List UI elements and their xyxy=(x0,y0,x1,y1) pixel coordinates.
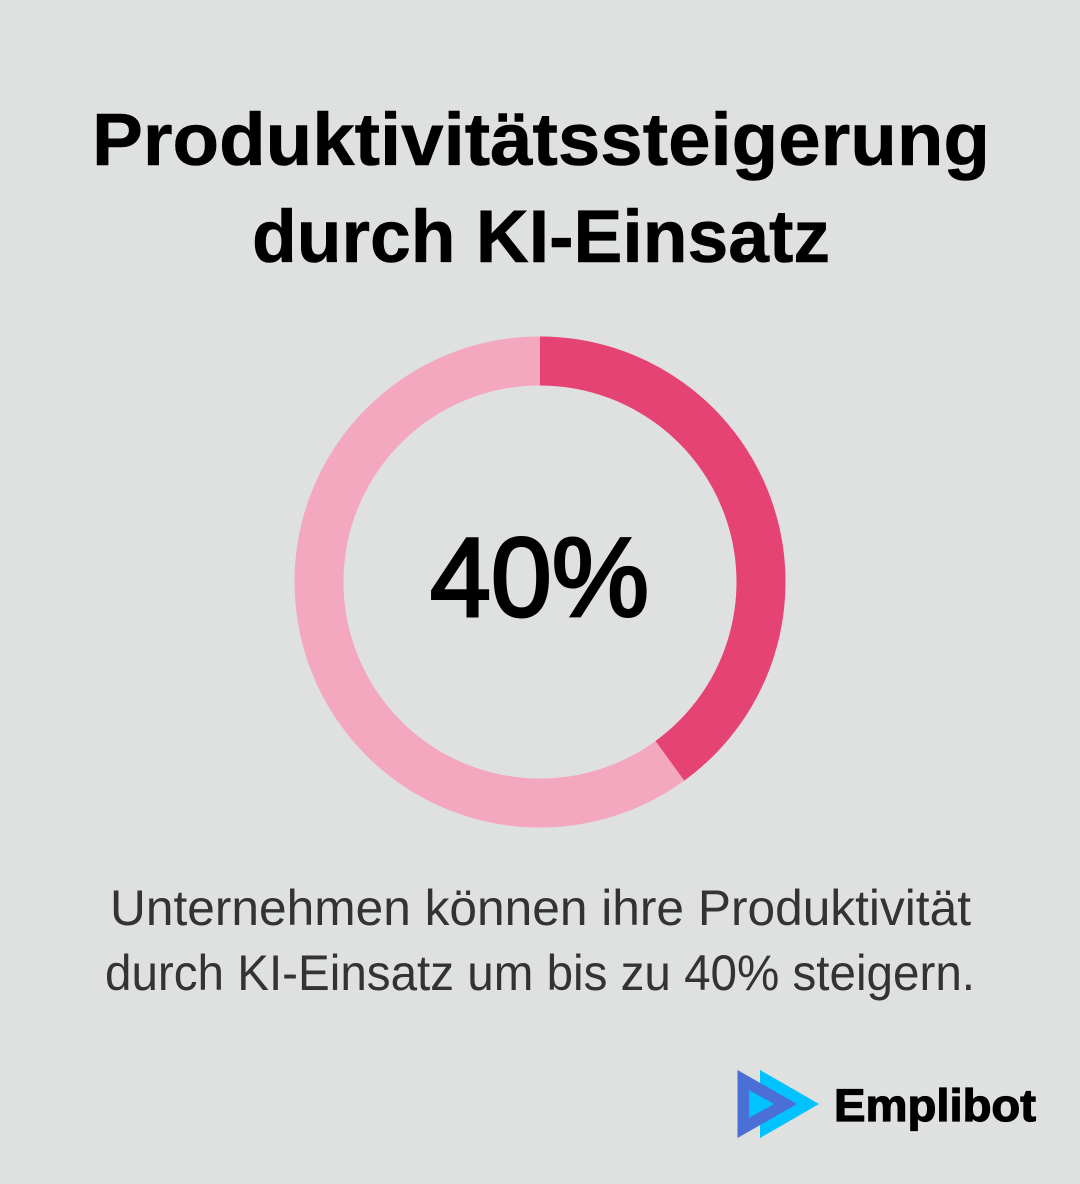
chart track: remaining 60% xyxy=(319,361,761,803)
description text xyxy=(105,880,975,1001)
title xyxy=(92,98,990,278)
chart segment: 40% xyxy=(540,361,761,761)
description text: durch KI-Einsatz um bis zu 40% steigern. xyxy=(105,945,975,1001)
title: Produktivitätssteigerung xyxy=(92,98,990,181)
donut chart: 40% xyxy=(319,361,761,803)
description text: Unternehmen können ihre Produktivität xyxy=(110,880,971,936)
center value: 40% xyxy=(430,515,649,640)
title: durch KI-Einsatz xyxy=(252,195,830,278)
icon: play triangles xyxy=(738,1070,819,1138)
logo: Emplibot xyxy=(738,1070,1036,1138)
logo wordmark: Emplibot xyxy=(834,1080,1036,1131)
